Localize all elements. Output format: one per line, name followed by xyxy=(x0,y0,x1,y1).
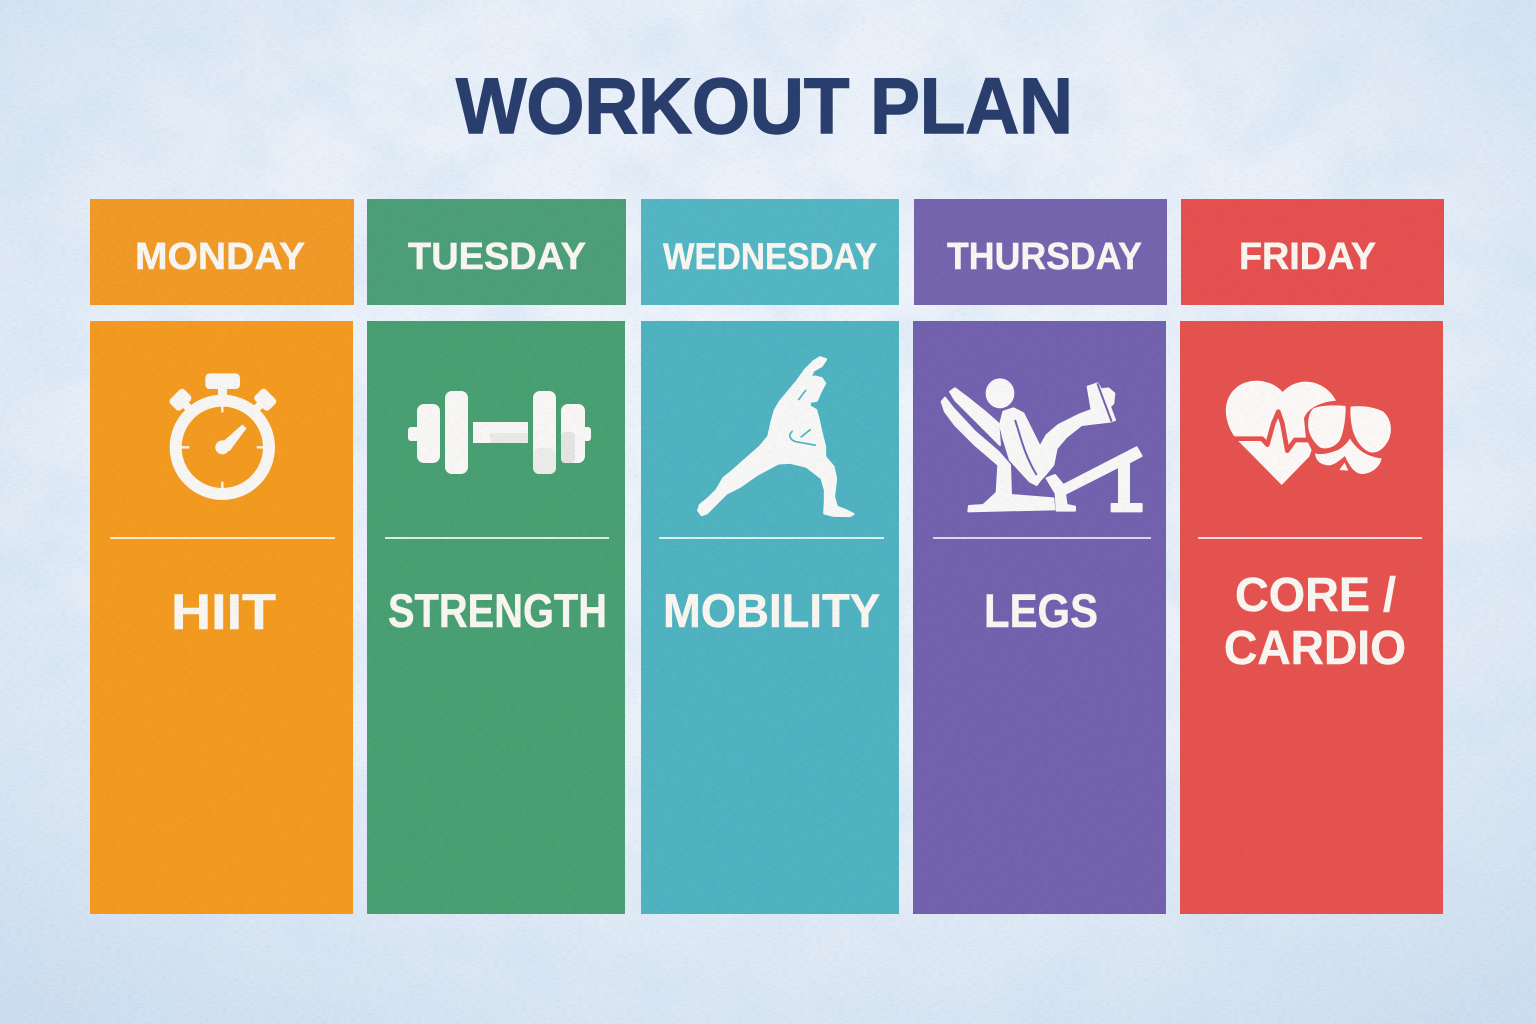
label: Legs: LEGS xyxy=(984,584,1098,637)
column: Thursday xyxy=(913,199,1167,914)
label: Core / Cardio: CARDIO xyxy=(1224,622,1406,675)
title: WORKOUT PLAN xyxy=(456,61,1073,150)
icon: dumbbell xyxy=(408,391,591,474)
divider xyxy=(659,537,884,539)
header: Monday: MONDAY xyxy=(135,236,305,278)
icon: stopwatch xyxy=(169,374,277,494)
column: Tuesday xyxy=(367,199,626,914)
icon: heart with boxing gloves xyxy=(1226,381,1391,485)
panel: Thursday Legs xyxy=(913,321,1166,914)
column: Friday xyxy=(1180,199,1444,914)
header: Friday xyxy=(1181,199,1444,305)
header: Tuesday xyxy=(367,199,626,305)
header: Friday: FRIDAY xyxy=(1239,236,1376,278)
header: Wednesday: WEDNESDAY xyxy=(663,236,877,277)
divider xyxy=(110,537,335,539)
header: Monday xyxy=(90,199,354,305)
header: Tuesday: TUESDAY xyxy=(408,236,586,278)
divider xyxy=(933,537,1151,539)
panel: Monday HIIT xyxy=(90,321,353,914)
divider xyxy=(1198,537,1422,539)
divider xyxy=(385,537,609,539)
header: Thursday xyxy=(914,199,1167,305)
label: Strength: STRENGTH xyxy=(388,584,607,637)
label: Core / Cardio xyxy=(1224,569,1406,675)
icon: stretching figure xyxy=(698,357,853,516)
panel: Friday Core and Cardio xyxy=(1180,321,1443,914)
panel: Tuesday Strength xyxy=(367,321,625,914)
column: Wednesday xyxy=(641,199,899,914)
column: Monday xyxy=(90,199,354,914)
header: Wednesday xyxy=(641,199,899,305)
icon: leg press machine xyxy=(942,379,1142,511)
header: Thursday: THURSDAY xyxy=(947,236,1142,278)
panel: Wednesday Mobility xyxy=(641,321,899,914)
label: Mobility: MOBILITY xyxy=(663,584,880,637)
label: HIIT: HIIT xyxy=(171,584,276,640)
label: Core / Cardio: CORE / xyxy=(1235,569,1396,622)
